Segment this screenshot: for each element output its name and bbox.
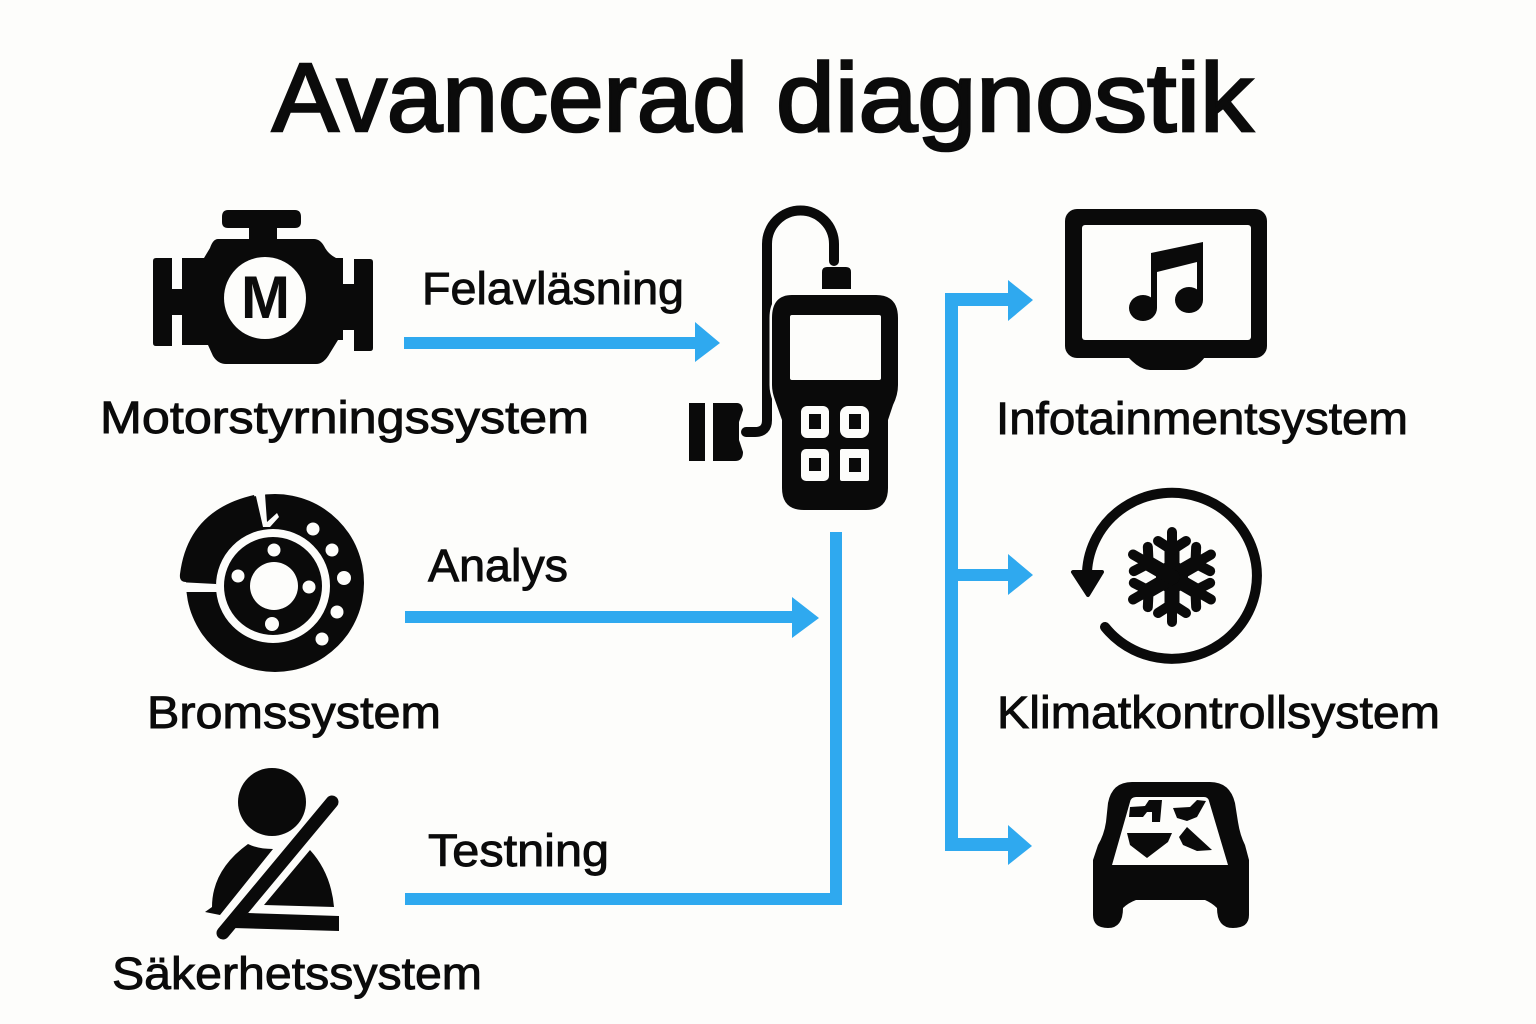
- icon: engine: [153, 210, 373, 364]
- scanner plug: [689, 403, 743, 461]
- arrow: scanner to right systems: [945, 280, 1033, 865]
- brake disc cracks: [178, 492, 279, 592]
- snowflake: [1126, 532, 1218, 622]
- title: diagnostik: [776, 43, 1254, 152]
- arrow: Testning up to scanner: [405, 532, 842, 905]
- label: Säkerhetssystem: Säkerhetssystem: [112, 948, 482, 999]
- scanner connector: [822, 267, 851, 289]
- icon: brake disc: [178, 492, 364, 672]
- icon: car with cracked windshield: [1093, 782, 1249, 928]
- music note: [1129, 242, 1203, 321]
- scanner buttons: [801, 406, 869, 481]
- engine letter M: M: [241, 264, 290, 331]
- label: Analys: Analys: [428, 540, 568, 591]
- scanner body: [772, 295, 898, 510]
- arrow: Analys to scanner: [405, 597, 819, 638]
- icon: climate control: [1073, 493, 1257, 659]
- scanner cable: [746, 210, 834, 432]
- label: Testning: Testning: [428, 825, 609, 876]
- label: Felavläsning: Felavläsning: [422, 263, 684, 314]
- label: Bromssystem: Bromssystem: [147, 687, 441, 738]
- title: [272, 43, 1254, 152]
- icon: infotainment screen: [1065, 209, 1267, 370]
- label: Infotainmentsystem: Infotainmentsystem: [996, 393, 1408, 444]
- label: Klimatkontrollsystem: Klimatkontrollsystem: [997, 687, 1440, 738]
- brake disc holes: [232, 522, 351, 646]
- scanner screen: [790, 315, 881, 380]
- arrow: Felavläsning to scanner: [404, 322, 720, 362]
- label: Motorstyrningssystem: Motorstyrningssystem: [100, 392, 589, 443]
- icon: diagnostic scanner: [689, 210, 898, 510]
- icon: seat belt: [205, 768, 339, 933]
- title: Avancerad: [272, 43, 748, 152]
